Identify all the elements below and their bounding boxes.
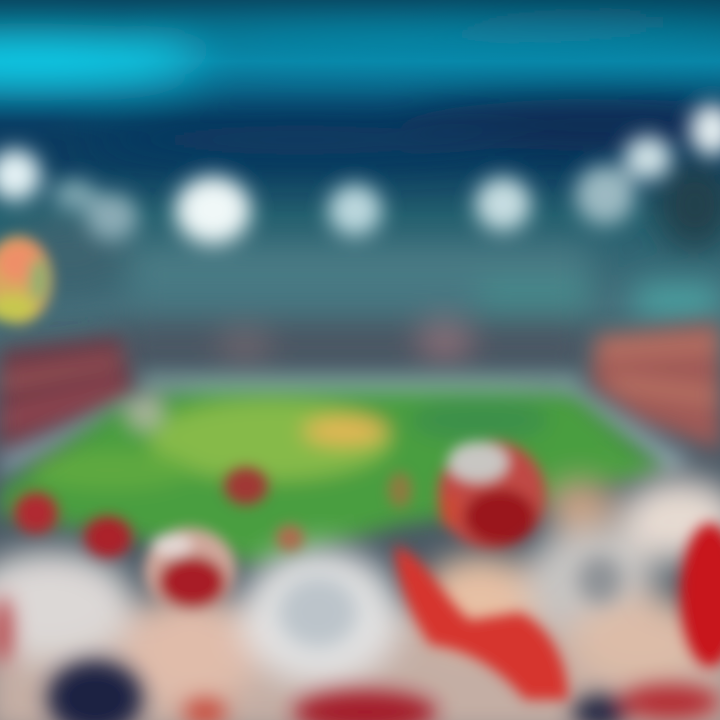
foreground crowd: base: [0, 478, 720, 720]
sky glow bands: [0, 0, 720, 158]
small red balls: [14, 467, 412, 558]
foreground ball details: [0, 556, 720, 720]
right stand: [560, 322, 720, 475]
stadium floodlights: [0, 104, 720, 244]
scoreboard glow at left: [0, 236, 52, 324]
red foreground shapes: [395, 523, 720, 700]
large ball centre right: [438, 441, 546, 549]
mid stadium haze: [10, 161, 720, 371]
left stand: [0, 335, 145, 480]
pitch: [0, 376, 665, 565]
mid ball left: [144, 528, 236, 612]
